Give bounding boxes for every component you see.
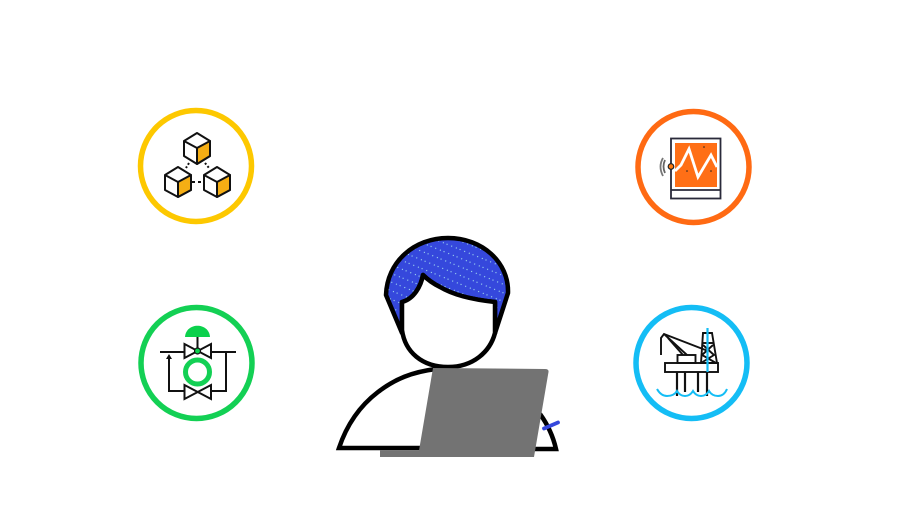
icon: yellow circle with connected cubes [140,110,252,222]
shoulders [339,369,436,448]
hair [386,238,508,333]
icon: blue circle with offshore oil rig [636,308,747,418]
figure: person at laptop [339,238,558,457]
icon: orange circle with signal monitor [638,112,749,222]
laptop [380,368,549,457]
face [402,275,495,367]
right shoulder [530,414,556,449]
icon: green circle with valve diagram [141,308,252,418]
pen [544,422,558,428]
